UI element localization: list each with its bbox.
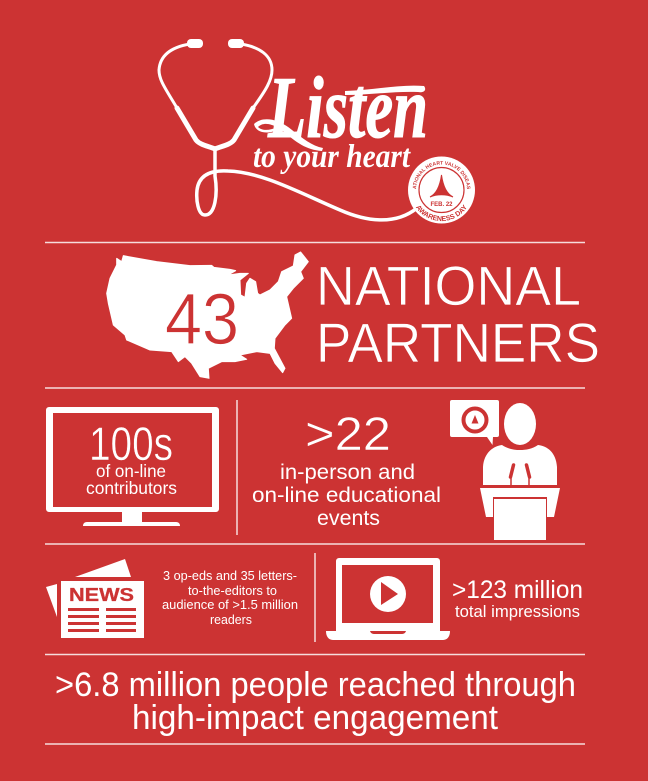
badge: awareness day: AWARENESS DAY <box>416 204 466 222</box>
number: 43: 43 <box>165 280 239 360</box>
logo: stethoscope with title <box>158 39 475 224</box>
text: op-eds and letters: audience of >1.5 million <box>162 598 298 612</box>
text: more than 123 million impressions: total impressions <box>455 602 580 621</box>
callout: people reached: high-impact engagement <box>132 699 499 737</box>
panel: educational events <box>252 400 560 540</box>
panel: national partners <box>107 252 600 378</box>
text: more than 123 million impressions: >123 million <box>452 576 583 604</box>
text: more than 22 events: in-person and <box>280 460 415 484</box>
text: more than 22 events: on-line educational <box>252 483 441 507</box>
text: more than 22 events: >22 <box>305 407 391 460</box>
panel: total impressions <box>326 558 583 640</box>
text: op-eds and letters: to-the-editors to <box>188 584 277 598</box>
callout: people reached <box>55 666 576 737</box>
text: op-eds and letters: 3 op-eds and 35 letters- <box>163 569 297 583</box>
text: 100s of on-line contributors: of on-line <box>96 461 166 481</box>
text: 100s of on-line contributors: contributors <box>86 478 177 498</box>
badge: awareness day: NATIONAL HEART VALVE DISEASE <box>412 161 470 189</box>
icon: monitor <box>46 407 219 526</box>
heading: national partners: NATIONAL <box>316 254 581 317</box>
heading: to your heart: to your heart <box>253 139 411 175</box>
text: more than 22 events <box>252 407 441 530</box>
icon: map of the United States <box>107 252 308 378</box>
heading: Listen: Listen <box>267 60 428 157</box>
text: 100s of on-line contributors <box>86 417 177 498</box>
icon: speaker at podium <box>450 400 560 540</box>
text: more than 22 events: events <box>317 506 380 530</box>
decorative swash of the L and the t <box>254 86 425 151</box>
text: more than 123 million impressions <box>452 576 583 621</box>
text: op-eds and letters: readers <box>210 613 252 627</box>
panel: op-eds and letters <box>46 559 298 638</box>
callout: people reached: >6.8 million people reached through <box>55 666 576 704</box>
heading: national partners: PARTNERS <box>316 311 600 374</box>
icon: newspaper <box>46 559 144 638</box>
icon: newspaper: NEWS <box>69 585 134 605</box>
text: op-eds and letters <box>162 569 298 627</box>
text: 100s of on-line contributors: 100s <box>89 417 173 470</box>
heading: national partners <box>316 254 600 374</box>
badge: awareness day <box>408 156 475 224</box>
icon: laptop with play button <box>326 558 450 640</box>
panel: on-line contributors <box>46 407 219 526</box>
icon: stethoscope <box>159 39 417 220</box>
badge: awareness day: FEB. 22 <box>430 202 453 208</box>
